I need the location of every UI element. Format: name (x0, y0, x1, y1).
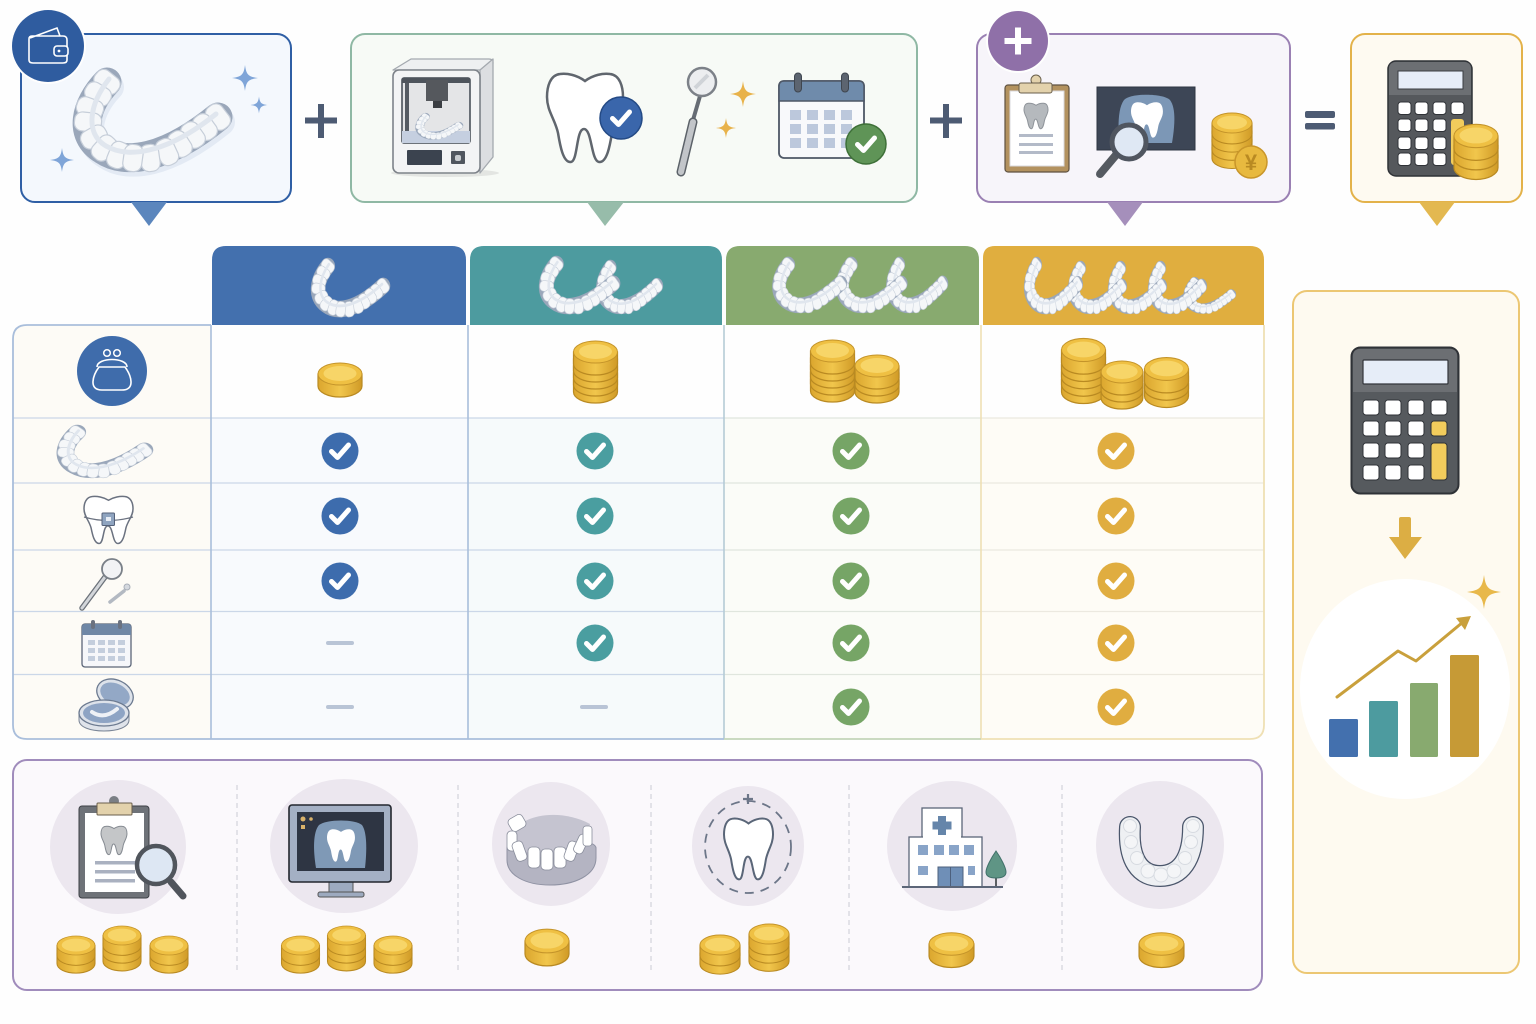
item: retainer (1096, 781, 1224, 967)
icon: calculator with coins (1388, 61, 1498, 179)
panel: optional fees (13, 760, 1262, 990)
icon: equals (1305, 111, 1335, 130)
row: case checks (326, 688, 1134, 726)
icon: wallet badge (10, 8, 86, 84)
panel: base aligner price (10, 8, 291, 226)
icon: calendar with check (779, 73, 886, 164)
panel: included treatment (351, 34, 917, 226)
coin (929, 933, 974, 967)
icon: coins with yen (1212, 113, 1267, 178)
coins (700, 924, 789, 974)
icon: sparkles gold (716, 81, 756, 138)
row icon: tooth with bracket (84, 496, 133, 543)
row: inspection checks (322, 562, 1134, 600)
panel: long-term cost summary (1293, 291, 1519, 973)
row: aligner checks (322, 432, 1134, 470)
icon: plus (930, 104, 962, 138)
item: impression model (492, 782, 610, 966)
item: records and inspection (50, 780, 188, 973)
item: x-ray imaging (270, 779, 418, 973)
coin (525, 929, 569, 966)
coins (57, 926, 188, 973)
pointer: green (587, 202, 624, 226)
chart: rising cost (1300, 575, 1510, 799)
row: price coins (318, 338, 1188, 409)
row: adjustment checks (322, 498, 1134, 534)
icon: calculator (1352, 348, 1458, 494)
icon: aligner (74, 66, 234, 173)
comparison table (13, 325, 1264, 739)
arrow: down (1389, 517, 1422, 559)
icon: clipboard (1005, 75, 1069, 172)
pointer: gold (1419, 202, 1455, 226)
icon: plus badge (986, 9, 1050, 73)
item: clinic (887, 781, 1017, 967)
icon: dental mirror (681, 68, 716, 172)
pointer: blue (131, 202, 167, 226)
table header: column 2 (470, 246, 722, 325)
table header: column 1 (212, 246, 466, 325)
coin (1139, 933, 1184, 967)
coins (281, 926, 412, 973)
pointer: purple (1107, 202, 1143, 226)
icon: tooth with check (547, 74, 642, 162)
row icon: purse (77, 336, 147, 406)
row icon: calendar (82, 620, 131, 667)
row icon: retainer case (79, 673, 138, 731)
icon: coins with yen: ¥ (1245, 150, 1258, 175)
icon: sparkles (50, 65, 268, 172)
row icon: aligner (57, 424, 154, 478)
panel: total estimate (1351, 34, 1522, 226)
item: tooth care (692, 786, 804, 974)
row: scheduling checks (326, 624, 1134, 662)
icon: plus (305, 104, 337, 138)
icon: x-ray with magnifier (1097, 87, 1195, 174)
table header: column 4 (983, 246, 1264, 325)
panel: additional costs (977, 9, 1290, 226)
table header: column 3 (726, 246, 979, 325)
icon: 3D printer (391, 59, 499, 177)
row icon: mirror (82, 559, 130, 608)
